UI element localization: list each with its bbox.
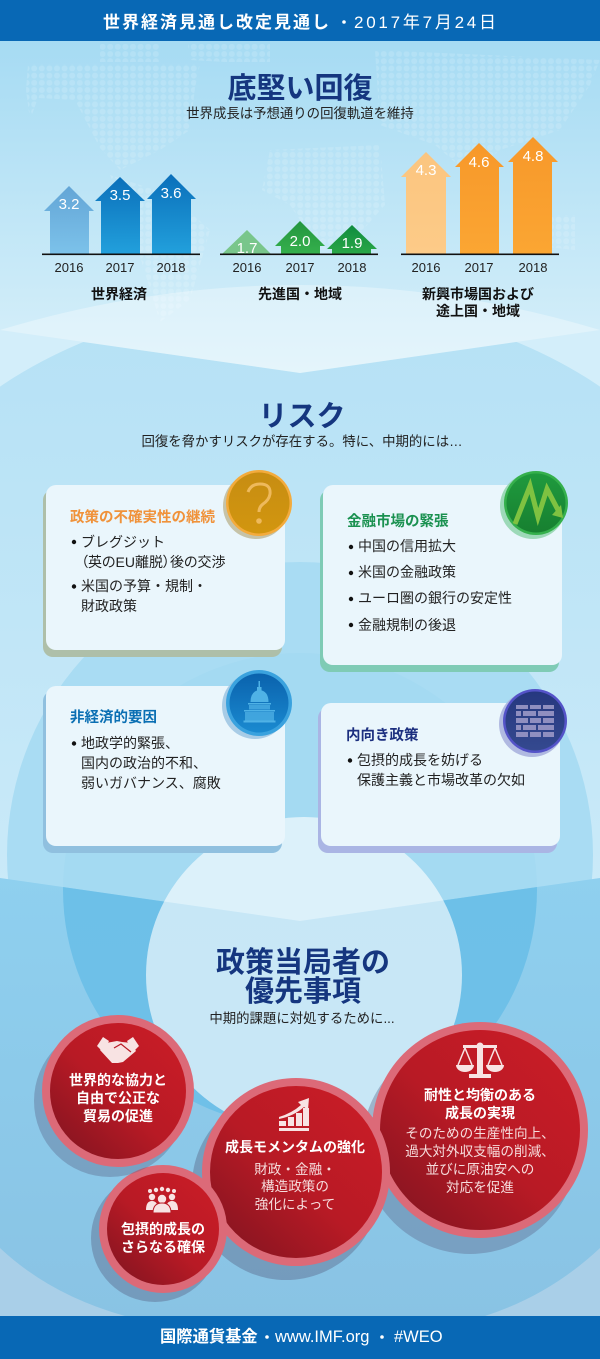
text: resilience and balance: 成長の実現: [445, 1105, 515, 1121]
bullets: inward-looking policies: 包摂的成長を妨げる: [357, 752, 483, 768]
arrow: advanced 2017: 2.0: [290, 233, 310, 250]
icon: question mark: [223, 470, 292, 539]
text: global cooperation: [69, 1072, 167, 1124]
circle: resilience and balance: [362, 1022, 588, 1254]
arrow: world 2018: [147, 174, 196, 254]
bullets: financial tensions: 金融規制の後退: [358, 617, 456, 633]
heading: policymaker priorities: 政策当局者の: [216, 946, 390, 979]
bullets: non-economic factors: 地政学的緊張、: [81, 735, 179, 751]
text: inclusive growth: 包摂的成長の: [121, 1221, 205, 1237]
heading: recovery: 底堅い回復: [227, 72, 373, 105]
bullets: financial tensions: [349, 538, 512, 633]
arrow: emerging 2017: [455, 143, 504, 254]
chart: world economy: [42, 174, 200, 302]
heading: policy uncertainty: 政策の不確実性の継続: [70, 508, 215, 526]
circle: growth momentum: [192, 1078, 390, 1280]
arrow: world 2017: [95, 177, 145, 254]
label: emerging markets: 途上国・地域: [436, 303, 520, 319]
text: resilience and balance: 対応を促進: [446, 1180, 514, 1195]
panel: financial tensions: [320, 471, 568, 672]
bullets: non-economic factors: 弱いガバナンス、腐敗: [81, 775, 221, 791]
arrow: world 2016: 3.2: [59, 196, 79, 213]
arrow: advanced 2018: [327, 225, 377, 254]
panel: policy uncertainty: [43, 470, 292, 657]
chart: world economy: 2017: [106, 260, 134, 275]
subheading: recovery: 世界成長は予想通りの回復軌道を維持: [186, 105, 414, 121]
icon: brick wall: [499, 689, 567, 757]
arrow: world 2018: 3.6: [161, 185, 181, 202]
chart: emerging markets: 2016: [412, 260, 440, 275]
arrow: advanced 2018: 1.9: [342, 235, 362, 252]
text: inclusive growth: [121, 1221, 205, 1255]
arrow: advanced 2017: [275, 221, 325, 254]
text: resilience and balance: [405, 1087, 555, 1195]
text: inclusive growth: さらなる確保: [121, 1239, 205, 1255]
chart: emerging markets: [401, 137, 559, 319]
text: global cooperation: 貿易の促進: [83, 1108, 153, 1124]
text: resilience and balance: 耐性と均衡のある: [424, 1087, 536, 1103]
bullets: policy uncertainty: ブレグジット: [81, 534, 165, 550]
subheading: risks: 回復を脅かすリスクが存在する。特に、中期的には…: [142, 433, 462, 449]
text: growth momentum: 成長モメンタムの強化: [225, 1139, 365, 1155]
chart: world economy: 2016: [55, 260, 83, 275]
bullets: non-economic factors: 国内の政治的不和、: [81, 755, 207, 771]
arrow: emerging 2016: [401, 152, 451, 254]
footer bar: www.IMF.org: [274, 1328, 369, 1346]
panel: inward-looking policies: [318, 689, 567, 853]
icon: capitol building: [222, 670, 292, 739]
label: world economy: 世界経済: [91, 286, 147, 302]
heading: policymaker priorities: 優先事項: [245, 975, 361, 1008]
text: growth momentum: [225, 1139, 365, 1212]
text: global cooperation: 世界的な協力と: [69, 1072, 167, 1088]
header bar: 世界経済見通し改定見通し: [103, 12, 329, 32]
bullets: policy uncertainty: 米国の予算・規制・: [81, 578, 207, 594]
bullets: financial tensions: 中国の信用拡大: [358, 538, 456, 554]
arrow: world 2016: [44, 186, 94, 254]
chart: advanced economies: 2017: [286, 260, 314, 275]
chart: emerging markets: 2018: [519, 260, 547, 275]
header bar: [0, 0, 600, 41]
chart: emerging markets: 2017: [465, 260, 493, 275]
icon: market zigzag: [500, 471, 568, 539]
bullets: non-economic factors: [72, 735, 221, 791]
arrow: emerging 2016: 4.3: [416, 162, 436, 179]
heading: financial tensions: 金融市場の緊張: [347, 512, 449, 530]
bullets: policy uncertainty: 財政政策: [81, 598, 137, 614]
bullets: financial tensions: ユーロ圏の銀行の安定性: [358, 590, 512, 606]
arrow: advanced 2016: 1.7: [237, 240, 257, 257]
arrow: advanced 2016: [222, 230, 271, 257]
arrow: emerging 2018: 4.8: [523, 148, 543, 165]
heading: non-economic factors: 非経済的要因: [70, 708, 157, 726]
text: resilience and balance: 過大対外収支幅の削減、: [405, 1143, 555, 1159]
bullets: policy uncertainty: （英のEU離脱）後の交渉: [81, 554, 225, 570]
heading: inward-looking policies: 内向き政策: [346, 726, 419, 744]
arrow: emerging 2017: 4.6: [469, 154, 489, 171]
text: growth momentum: 財政・金融・: [254, 1162, 336, 1177]
icon: scales: [456, 1042, 504, 1078]
bullets: financial tensions: 米国の金融政策: [358, 564, 456, 580]
panel: non-economic factors: [43, 670, 292, 853]
chart: advanced economies: 2018: [338, 260, 366, 275]
text: growth momentum: 強化によって: [255, 1197, 335, 1212]
text: resilience and balance: 並びに原油安への: [426, 1162, 534, 1177]
label: advanced economies: 先進国・地域: [258, 286, 342, 302]
chart: world economy: 2018: [157, 260, 185, 275]
footer bar: 国際通貨基金: [160, 1327, 258, 1346]
circle: inclusive growth: [91, 1165, 227, 1302]
arrow: emerging 2018: [508, 137, 558, 254]
chart: advanced economies: [220, 221, 378, 302]
text: resilience and balance: そのための生産性向上、: [405, 1126, 555, 1141]
icon: handshake: [97, 1037, 139, 1063]
bullets: inward-looking policies: [348, 752, 525, 788]
heading: risks: リスク: [258, 401, 346, 433]
icon: people: [146, 1187, 178, 1213]
footer bar: #WEO: [394, 1328, 443, 1346]
text: growth momentum: 構造政策の: [261, 1178, 329, 1194]
chart: advanced economies: 2016: [233, 260, 261, 275]
bullets: inward-looking policies: 保護主義と市場改革の欠如: [357, 772, 525, 788]
text: global cooperation: 自由で公正な: [76, 1090, 160, 1106]
header bar: 2017年7月24日: [354, 13, 496, 32]
icon: growth chart: [279, 1098, 309, 1131]
circle: global cooperation: [34, 1015, 194, 1177]
subheading: priorities: 中期的課題に対処するために...: [209, 1011, 395, 1026]
arrow: world 2017: 3.5: [110, 187, 130, 204]
footer bar: [0, 1316, 600, 1359]
label: emerging markets: 新興市場国および: [422, 286, 534, 302]
bullets: policy uncertainty: [72, 534, 225, 614]
